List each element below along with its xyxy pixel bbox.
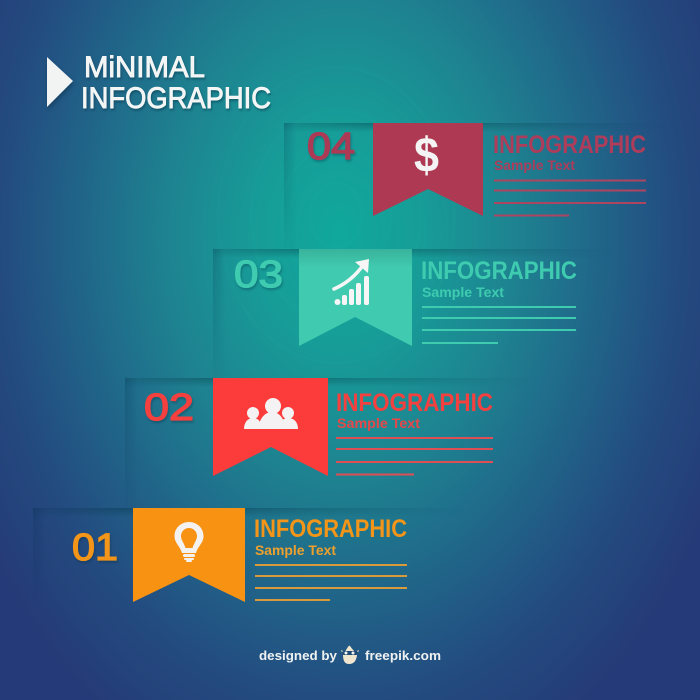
title text xyxy=(81,51,271,115)
number 04: 04 xyxy=(307,126,355,168)
icon: people xyxy=(244,398,298,429)
text lines 02 xyxy=(336,438,493,474)
step 02 xyxy=(144,378,493,476)
subheading 02: Sample Text xyxy=(337,415,420,431)
icon: freepik logo xyxy=(341,646,359,664)
ribbon 02 xyxy=(213,378,328,476)
subheading 03: Sample Text xyxy=(422,284,504,300)
title text: MiNIMAL xyxy=(84,51,205,84)
ribbon 04 xyxy=(373,123,483,216)
title text: INFOGRAPHIC xyxy=(81,82,271,115)
number 02: 02 xyxy=(144,387,194,429)
heading 01: INFOGRAPHIC xyxy=(254,515,407,543)
footer credit: freepik.com xyxy=(365,648,441,663)
step 04 xyxy=(307,123,646,216)
footer credit: designed by xyxy=(259,648,338,663)
icon: dollar: $ xyxy=(414,129,439,183)
heading 04: INFOGRAPHIC xyxy=(493,131,646,159)
step 03 xyxy=(234,249,577,346)
subheading 01: Sample Text xyxy=(255,542,336,558)
ribbon 03 xyxy=(299,249,412,346)
subheading 04: Sample Text xyxy=(494,157,575,173)
number 03: 03 xyxy=(234,254,283,296)
step 01 xyxy=(72,508,407,602)
icon: play triangle xyxy=(47,57,73,107)
faint background rings xyxy=(218,67,454,363)
panel shadows xyxy=(33,123,598,543)
ribbon 01 xyxy=(133,508,245,602)
text lines 03 xyxy=(422,307,576,343)
heading 03: INFOGRAPHIC xyxy=(421,257,577,285)
icon: growth chart xyxy=(334,259,369,305)
text lines 04 xyxy=(494,180,646,216)
number 01: 01 xyxy=(72,527,118,569)
footer credit xyxy=(259,646,441,664)
title block xyxy=(47,51,271,115)
heading 02: INFOGRAPHIC xyxy=(336,389,493,417)
icon: light bulb xyxy=(174,522,204,562)
text lines 01 xyxy=(255,565,407,600)
